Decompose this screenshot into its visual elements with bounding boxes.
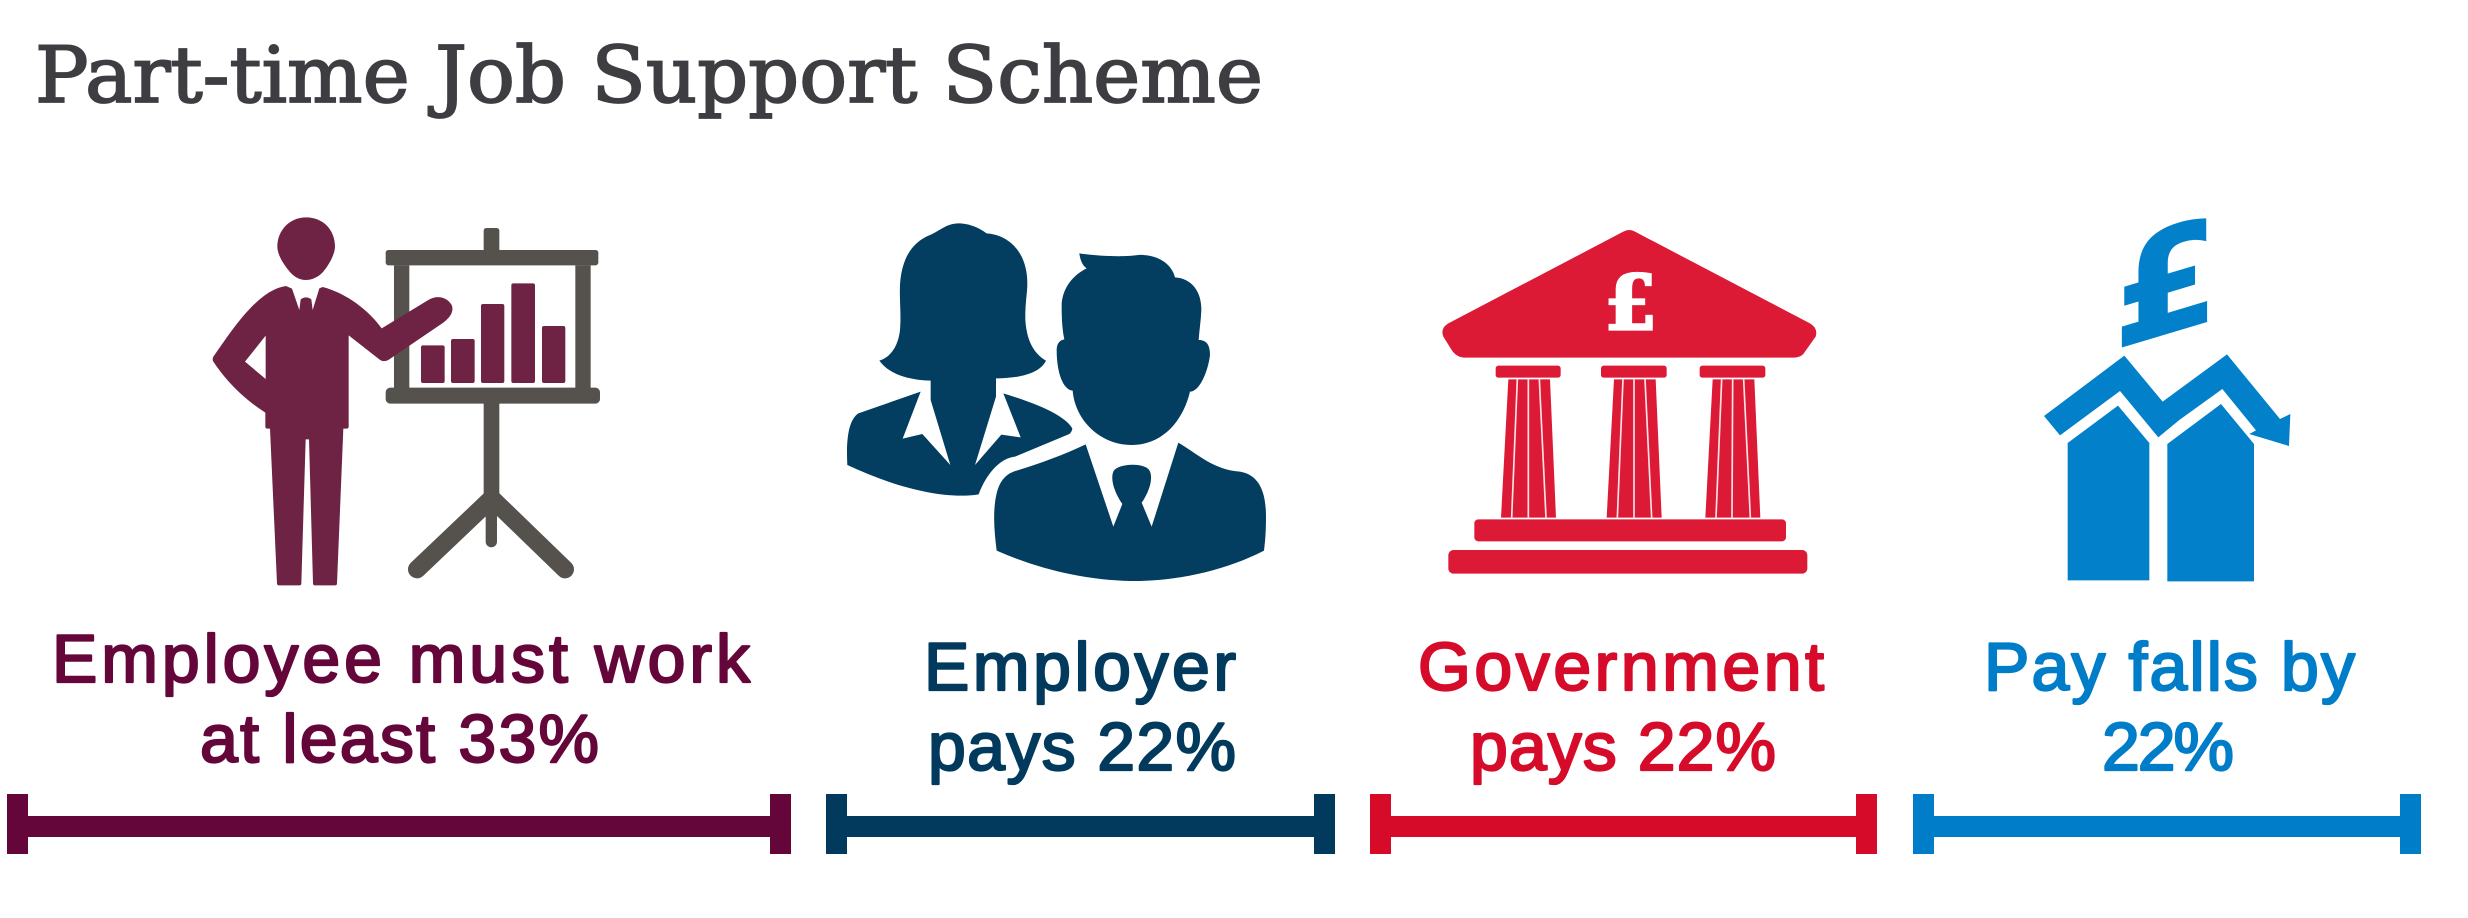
columns — [1496, 366, 1765, 518]
man suit — [994, 443, 1266, 581]
panel: employer — [826, 223, 1335, 854]
label: government — [1418, 629, 1824, 785]
panel: government — [1370, 230, 1877, 854]
title: Part-time Job Support Scheme — [35, 31, 1263, 121]
steps — [1448, 519, 1807, 574]
label: pay falls: Pay falls by — [1984, 629, 2355, 705]
label: employer: pays 22% — [928, 709, 1236, 785]
label: employee — [52, 621, 751, 777]
panel: pay falls — [1913, 186, 2421, 854]
icon: employer people — [847, 223, 1266, 581]
icon: bank building — [1442, 230, 1816, 574]
panel: employee — [7, 217, 791, 854]
chart bars — [421, 283, 565, 383]
icon: person — [213, 217, 452, 585]
label: government: Government — [1418, 629, 1824, 705]
columns — [2068, 406, 2149, 580]
label: pay falls — [1984, 629, 2355, 785]
label: pay falls: 22% — [2102, 709, 2234, 785]
range bar: pay falls — [1913, 794, 2421, 854]
falling arrow — [2044, 354, 2290, 446]
skewed pound sign: £ — [2114, 186, 2218, 383]
label: government: pays 22% — [1470, 709, 1776, 785]
icon: easel — [386, 228, 600, 569]
range bar: employee — [7, 794, 791, 854]
label: employee: Employee must work — [52, 621, 751, 697]
woman — [847, 223, 1072, 496]
icon: falling pay chart — [2044, 186, 2290, 581]
pediment — [1442, 230, 1816, 358]
label: employer: Employer — [924, 629, 1236, 705]
man head — [1057, 253, 1210, 445]
pound sign: £ — [1604, 258, 1657, 347]
label: employee: at least 33% — [200, 701, 599, 777]
label: employer — [924, 629, 1236, 785]
range bar: employer — [826, 794, 1335, 854]
icon: presenter with chart — [213, 217, 600, 585]
range bar: government — [1370, 794, 1877, 854]
